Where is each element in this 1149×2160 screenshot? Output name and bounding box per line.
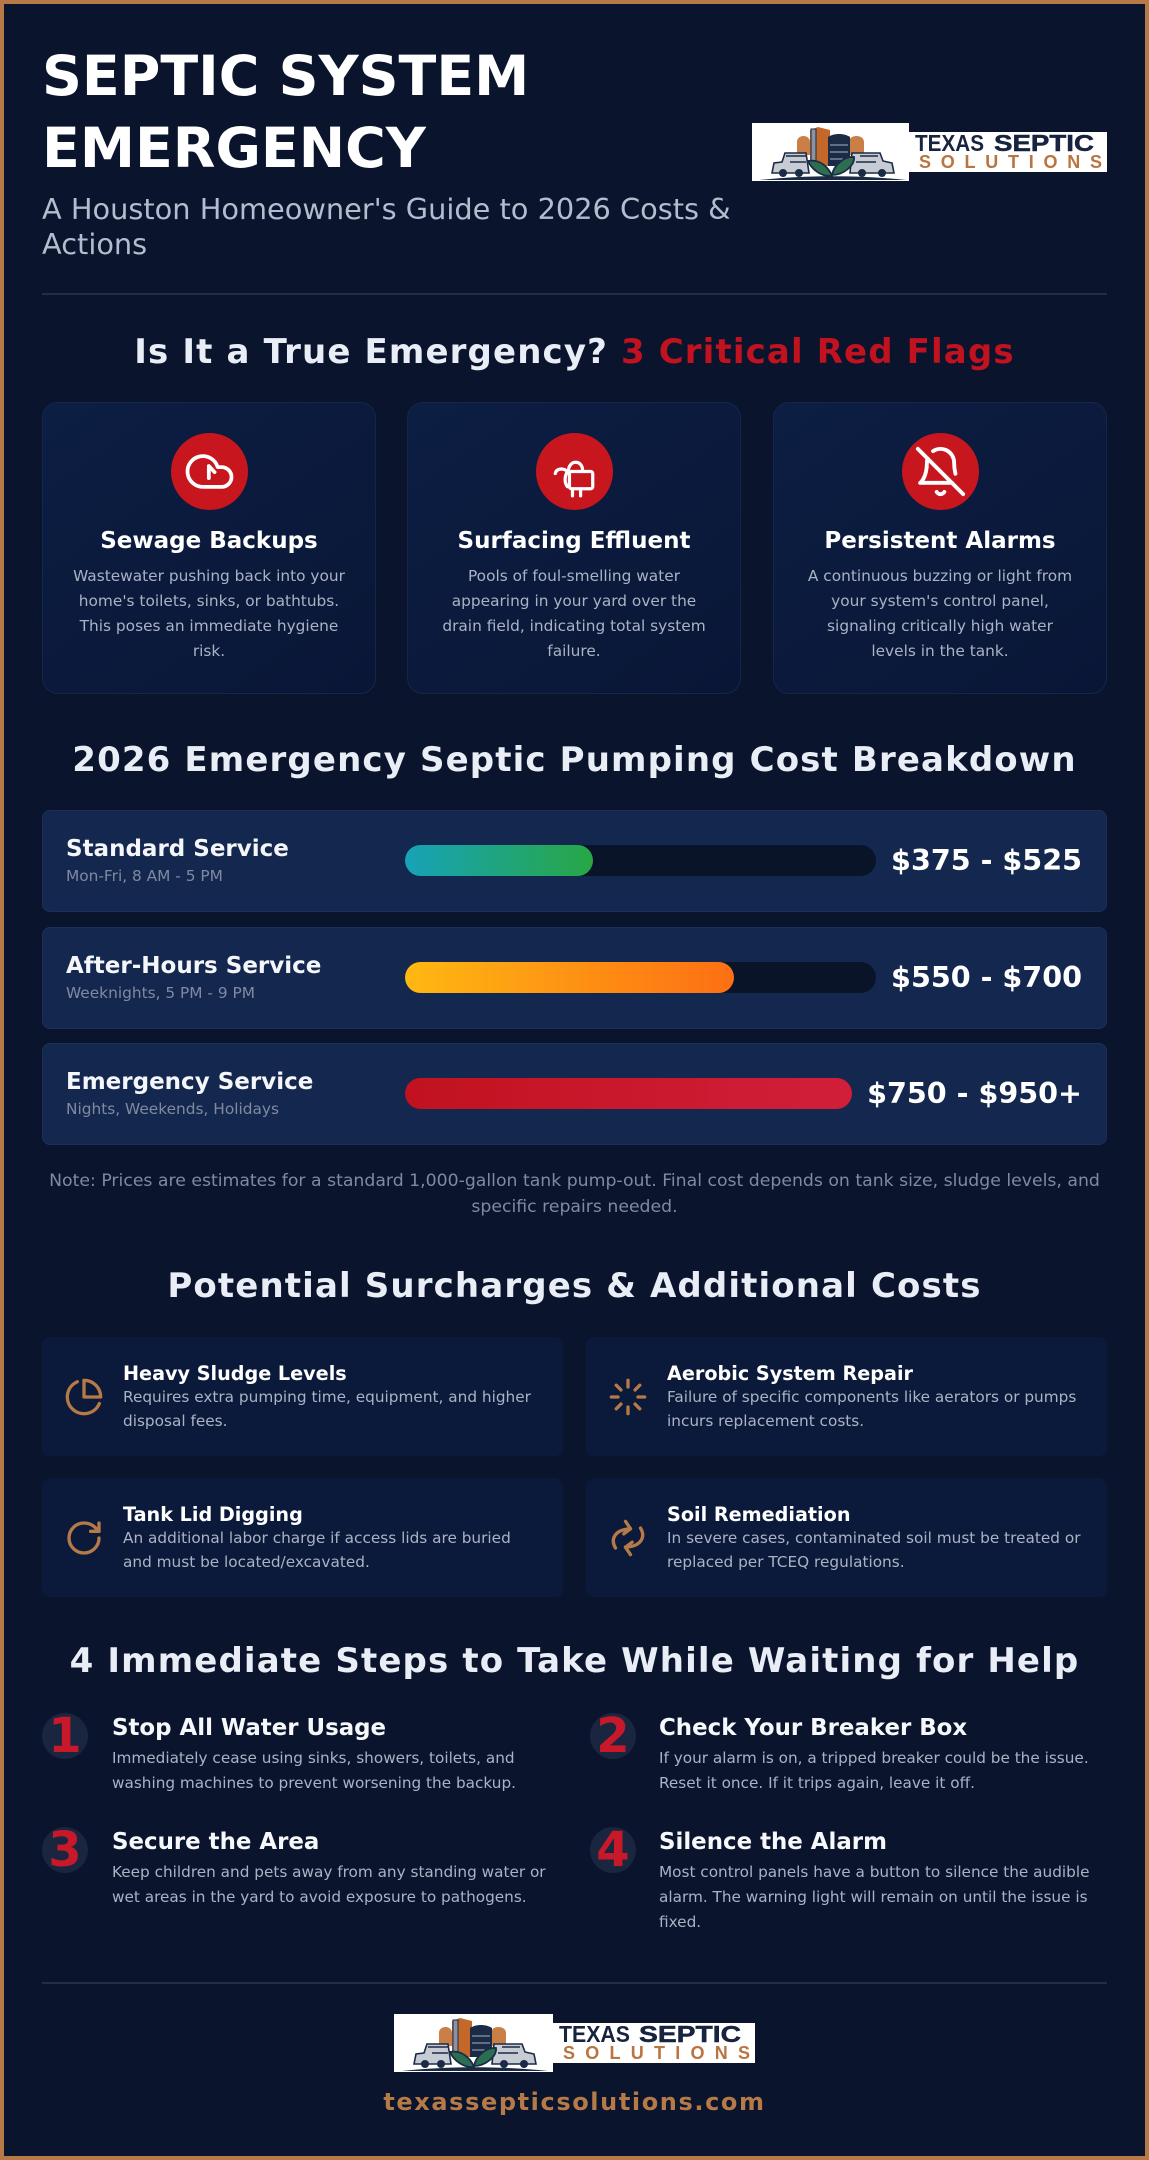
item text — [123, 1388, 531, 1430]
price: $550 - $700 — [891, 960, 1082, 994]
step title: Stop All Water Usage — [112, 1715, 386, 1741]
panel: after-hours service — [42, 927, 1107, 1029]
card text: drain field, indicating total system — [442, 617, 706, 635]
step text — [659, 1749, 1089, 1792]
item title: Soil Remediation — [667, 1503, 850, 1526]
heading: surcharges: Potential Surcharges & Additional Costs — [167, 1266, 982, 1306]
step text: alarm. The warning light will remain on until the issue is — [659, 1888, 1088, 1906]
subtitle — [42, 192, 731, 260]
step number — [590, 1713, 636, 1759]
item title: Tank Lid Digging — [123, 1503, 303, 1526]
panel: tank lid digging — [42, 1478, 563, 1597]
service label: Standard Service — [66, 836, 289, 862]
step number — [590, 1827, 636, 1873]
step number — [42, 1827, 88, 1873]
step text — [112, 1863, 546, 1906]
step text — [659, 1863, 1089, 1931]
item text: incurs replacement costs. — [667, 1412, 864, 1430]
step text — [112, 1749, 516, 1792]
logo: footer: TEXAS — [559, 2021, 630, 2047]
step number: 3 — [48, 1822, 82, 1878]
step number: 2 — [596, 1708, 630, 1764]
card text — [808, 567, 1072, 660]
service label: After-Hours Service — [66, 953, 321, 979]
panel: heavy sludge — [42, 1337, 563, 1456]
panel: emergency service — [42, 1043, 1107, 1145]
card title: Persistent Alarms — [824, 528, 1056, 554]
card text: A continuous buzzing or light from — [808, 567, 1072, 585]
heading: red flags: Is It a True Emergency? 3 Critical Red Flags — [134, 332, 1015, 372]
step title: Check Your Breaker Box — [659, 1715, 967, 1741]
step text: Immediately cease using sinks, showers, toilets, and — [112, 1749, 515, 1767]
step title: Silence the Alarm — [659, 1829, 887, 1855]
step 2 — [590, 1708, 1089, 1792]
step text: washing machines to prevent worsening the backup. — [112, 1774, 516, 1792]
price: $375 - $525 — [891, 843, 1082, 877]
icon: refresh arrows — [612, 1520, 644, 1556]
item text: Requires extra pumping time, equipment, and higher — [123, 1388, 531, 1406]
item text — [667, 1529, 1081, 1570]
cost bar — [405, 1078, 852, 1109]
item text — [667, 1388, 1076, 1430]
step text: Keep children and pets away from any standing water or — [112, 1863, 546, 1881]
website url: texassepticsolutions.com — [383, 2088, 766, 2116]
step title: Secure the Area — [112, 1829, 319, 1855]
card text: failure. — [547, 642, 601, 660]
step number — [42, 1713, 88, 1759]
logo: footer: SOLUTIONS — [563, 2043, 750, 2063]
note — [49, 1171, 1100, 1217]
logo: header: TEXAS — [915, 130, 984, 156]
title: SEPTIC SYSTEM — [42, 45, 529, 109]
item text: replaced per TCEQ regulations. — [667, 1552, 905, 1570]
subtitle: A Houston Homeowner's Guide to 2026 Costs & — [42, 192, 731, 226]
title: EMERGENCY — [42, 117, 426, 181]
step number: 4 — [596, 1822, 630, 1878]
item title: Aerobic System Repair — [667, 1362, 913, 1385]
logo: footer: SEPTIC — [639, 2021, 741, 2047]
card title: Surfacing Effluent — [458, 528, 690, 554]
panel: standard service — [42, 810, 1107, 912]
item text — [123, 1529, 511, 1570]
subtitle: Actions — [42, 226, 147, 260]
card text — [73, 567, 345, 660]
step text: Reset it once. If it trips again, leave it off. — [659, 1774, 975, 1792]
card text: Wastewater pushing back into your — [73, 567, 345, 585]
step text: Most control panels have a button to silence the audible — [659, 1863, 1089, 1881]
step text: If your alarm is on, a tripped breaker could be the issue. — [659, 1749, 1089, 1767]
card text: appearing in your yard over the — [452, 592, 696, 610]
panel: aerobic repair — [586, 1337, 1107, 1456]
step 3 — [42, 1822, 546, 1906]
step text: wet areas in the yard to avoid exposure to pathogens. — [112, 1888, 527, 1906]
service hours: Weeknights, 5 PM - 9 PM — [66, 984, 255, 1002]
panel: soil remediation — [586, 1478, 1107, 1597]
logo: header: SEPTIC — [994, 130, 1094, 156]
card text: signaling critically high water — [827, 617, 1053, 635]
item text: In severe cases, contaminated soil must be treated or — [667, 1529, 1081, 1547]
title — [42, 45, 529, 181]
card text — [442, 567, 706, 660]
heading: cost breakdown: 2026 Emergency Septic Pumping Cost Breakdown — [72, 740, 1077, 780]
note: specific repairs needed. — [471, 1197, 678, 1217]
panel: surfacing effluent — [407, 402, 741, 694]
icon: bell off — [902, 433, 979, 510]
icon: cloud — [171, 433, 248, 510]
item title: Heavy Sludge Levels — [123, 1362, 347, 1385]
service label: Emergency Service — [66, 1069, 313, 1095]
icon: rotate — [67, 1521, 101, 1555]
logo: header: SOLUTIONS — [919, 152, 1102, 172]
price: $750 - $950+ — [867, 1076, 1082, 1110]
item text: Failure of specific components like aerators or pumps — [667, 1388, 1076, 1406]
note: Note: Prices are estimates for a standard 1,000-gallon tank pump-out. Final cost depends on tank size, sludge levels, and — [49, 1171, 1100, 1191]
icon: pie chart — [66, 1378, 102, 1416]
cost bar — [405, 845, 876, 876]
heading: immediate steps: 4 Immediate Steps to Take While Waiting for Help — [70, 1641, 1079, 1681]
service hours: Nights, Weekends, Holidays — [66, 1100, 279, 1118]
card text: levels in the tank. — [871, 642, 1009, 660]
logo: header — [752, 123, 1107, 181]
logo: footer — [394, 2014, 755, 2072]
step 4 — [590, 1822, 1089, 1931]
card text: risk. — [193, 642, 225, 660]
item text: disposal fees. — [123, 1412, 228, 1430]
card title: Sewage Backups — [100, 528, 318, 554]
icon: lock and cart — [536, 433, 613, 510]
card text: This poses an immediate hygiene — [80, 617, 338, 635]
service hours: Mon-Fri, 8 AM - 5 PM — [66, 867, 223, 885]
card text: Pools of foul-smelling water — [468, 567, 680, 585]
step text: fixed. — [659, 1913, 701, 1931]
panel: sewage backups — [42, 402, 376, 694]
item text: An additional labor charge if access lids are buried — [123, 1529, 511, 1547]
step 1 — [42, 1708, 516, 1792]
icon: loader — [610, 1378, 646, 1416]
cost bar — [405, 962, 876, 993]
card text: your system's control panel, — [831, 592, 1049, 610]
card text: home's toilets, sinks, or bathtubs. — [79, 592, 339, 610]
panel: persistent alarms — [773, 402, 1107, 694]
item text: and must be located/excavated. — [123, 1552, 370, 1570]
step number: 1 — [48, 1708, 82, 1764]
